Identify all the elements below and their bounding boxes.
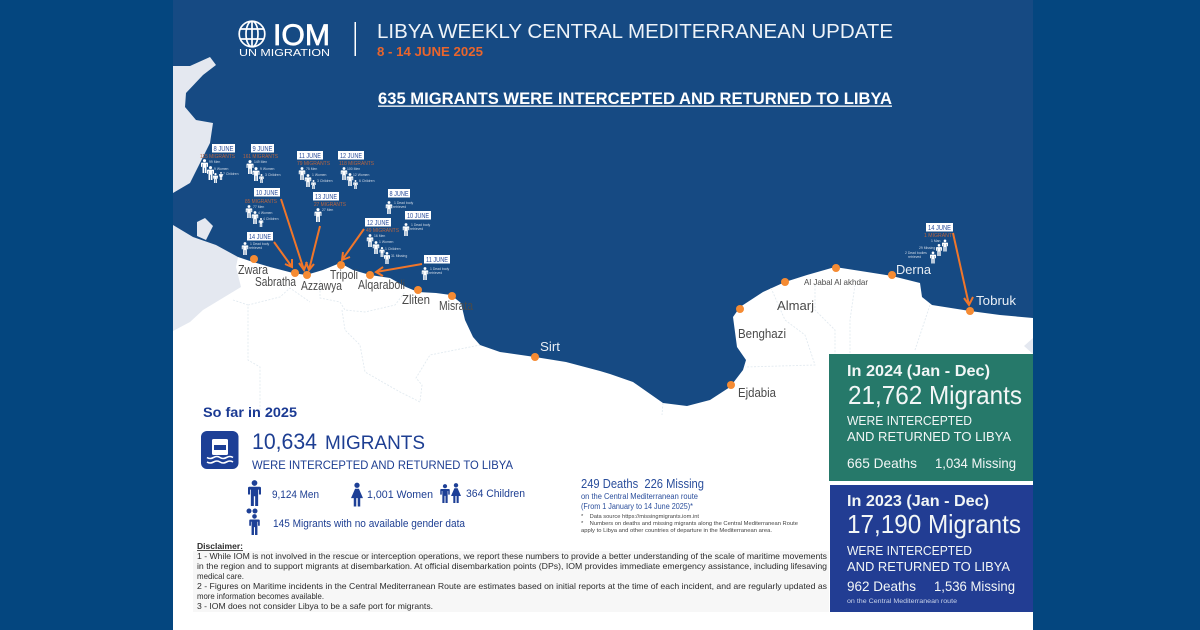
text block: deaths and missing 2025: * Data source https://missingmigrants.iom.int	[581, 514, 699, 520]
icon: boat on water	[201, 431, 238, 469]
incident: 8 June, 1 dead body: retrieved	[393, 205, 406, 209]
incident: 8 June, 1 dead body: 1 Dead body	[394, 201, 414, 205]
disclaimer	[193, 542, 829, 612]
panel: 2023 totals	[830, 485, 1033, 612]
gender breakdown: 145 Migrants with no available gender data	[273, 518, 466, 530]
incident: 14 June, Tobruk: retrieved	[908, 255, 921, 259]
header divider	[354, 22, 356, 56]
map labels: cities: Tripoli	[330, 268, 358, 282]
incident: 12 June, 49 migrants: 31 Missing	[391, 254, 407, 258]
incident: 11 June, 1 dead body	[422, 255, 450, 280]
total figure: 10,634	[252, 429, 317, 454]
incident: 11 June, 1 dead body: 11 JUNE	[426, 255, 448, 264]
incident: 10 June, 85 migrants: 10 JUNE	[256, 188, 278, 197]
panel: 2024 totals: 21,762 Migrants	[848, 380, 1022, 410]
incident: 14 June, Tobruk: 14 JUNE	[928, 223, 951, 232]
incident: 14 June, Tobruk: 1 MIGRANT	[924, 233, 953, 239]
incident: 9 June, 161 migrants: 9 JUNE	[252, 144, 273, 153]
map labels: cities: Tobruk	[976, 293, 1016, 308]
incident: 12 June, 49 migrants: 12 JUNE	[367, 218, 389, 227]
incident: 11 June, 79 migrants: 11 JUNE	[299, 151, 321, 160]
incident: 14 June, Tobruk: 29 Missing	[919, 246, 935, 250]
incident: 10 June, 85 migrants: 4 Children	[263, 217, 279, 221]
incident: 10 June, 1 dead body: 1 Dead body	[411, 223, 431, 227]
map labels: cities: Misrata	[439, 299, 473, 313]
total caption: WERE INTERCEPTED AND RETURNED TO LIBYA	[252, 458, 513, 472]
text block: deaths and missing 2025: * Numbers on deaths and missing migrants along the Central Mediterranean Route	[581, 521, 798, 527]
panel: 2024 totals: In 2024 (Jan - Dec)	[847, 363, 990, 380]
incident: 10 June, 1 dead body: retrieved	[410, 227, 423, 231]
map: land masses and borders	[173, 57, 1033, 630]
incident: 9 June, 161 migrants: 3 Children	[265, 173, 281, 177]
logo: IOM UN Migration: IOM	[273, 19, 330, 52]
incident: 10 June, 85 migrants: 85 MIGRANTS	[245, 199, 277, 205]
incident: 13 June, 27 migrants	[313, 192, 346, 222]
arrows: interception routes	[274, 199, 973, 305]
disclaimer: in the region and to support migrants at disembarkation. At official disembarkation points (DPs), IOM provides immediate emergency assistance, including lifesaving	[197, 562, 827, 571]
incident: 9 June, 161 migrants: 149 Men	[254, 160, 267, 164]
map labels: cities: Derna	[896, 262, 932, 277]
panel: 2024 totals	[829, 354, 1033, 481]
incident: 13 June, 27 migrants: 13 JUNE	[315, 192, 337, 201]
panel: 2023 totals: WERE INTERCEPTED	[847, 543, 972, 558]
gender breakdown	[246, 480, 525, 535]
incident: 13 June, 27 migrants: 27 MIGRANTS	[314, 202, 346, 208]
map labels: cities: Ejdabia	[738, 386, 776, 400]
panel: 2023 totals: AND RETURNED TO LIBYA	[847, 559, 1010, 574]
disclaimer: 2 - Figures on Maritime incidents in the Central Mediterranean Route are estimates based on initial reports at the time of each incident, and are regularly updated as	[197, 582, 827, 591]
incident: 12 June, 49 migrants	[365, 218, 407, 264]
incident: 8 June, 115 migrants	[200, 144, 239, 183]
disclaimer: more information becomes available.	[197, 592, 324, 601]
map labels: cities: Almarj	[777, 299, 814, 313]
heading: So far in 2025	[203, 404, 297, 420]
gender breakdown: 1,001 Women	[367, 489, 433, 501]
panel: 2024 totals: 665 Deaths	[847, 455, 917, 471]
title: LIBYA WEEKLY CENTRAL MEDITERRANEAN UPDATE	[377, 20, 893, 43]
icon: globe emblem	[239, 21, 265, 47]
incident: 13 June, 27 migrants: 27 Men	[322, 208, 333, 212]
disclaimer: Disclaimer:	[197, 542, 243, 551]
incident: 10 June, 1 dead body	[403, 211, 431, 236]
logo: IOM UN Migration: UN MIGRATION	[239, 48, 330, 59]
panel: 2023 totals: In 2023 (Jan - Dec)	[847, 493, 989, 510]
incident: 12 June, 49 migrants: 1 Women	[379, 240, 394, 244]
panel: 2024 totals: 1,034 Missing	[935, 455, 1016, 471]
panel: 2024 totals: AND RETURNED TO LIBYA	[847, 429, 1011, 444]
panel: 2023 totals: 962 Deaths	[847, 578, 916, 594]
panel: 2023 totals: 17,190 Migrants	[847, 509, 1021, 539]
incident: 11 June, 1 dead body: retrieved	[429, 271, 442, 275]
incident: 14 June, Tobruk: 2 Dead bodies	[905, 251, 927, 255]
incident: 11 June, 79 migrants: 75 Men	[306, 167, 317, 171]
incident: 14 June, 1 dead body: 1 Dead body	[250, 242, 270, 246]
incident: 14 June, 1 dead body: retrieved	[249, 246, 262, 250]
headline: 635 MIGRANTS WERE INTERCEPTED AND RETURNED TO LIBYA	[378, 89, 892, 108]
incident: 11 June, 79 migrants: 3 Children	[317, 179, 333, 183]
incident: 12 June, 49 migrants: 49 MIGRANTS	[366, 228, 399, 234]
panel: 2023 totals: on the Central Mediterranean route	[847, 599, 958, 605]
incident: 14 June, Tobruk: 1 Man	[931, 239, 941, 243]
incident: 10 June, 85 migrants	[245, 188, 280, 227]
incident: 12 June, 118 migrants: 118 MIGRANTS	[339, 161, 374, 167]
map panel: sea background	[173, 0, 1033, 630]
incident: 9 June, 161 migrants	[243, 144, 281, 183]
gender breakdown: 364 Children	[466, 488, 525, 500]
incident: 9 June, 161 migrants: 161 MIGRANTS	[243, 154, 278, 160]
incident: 14 June, 1 dead body: 14 JUNE	[249, 232, 271, 241]
incident: 11 June, 79 migrants	[297, 151, 333, 189]
incident: 10 June, 1 dead body: 10 JUNE	[407, 211, 429, 220]
incident: 14 June, 1 dead body	[242, 232, 273, 255]
map labels: cities: Benghazi	[738, 327, 786, 341]
map labels: cities: Zwara	[238, 263, 268, 277]
incident: 9 June, 161 migrants: 9 Women	[260, 167, 275, 171]
incident: 11 June, 1 dead body: 1 Dead body	[430, 267, 450, 271]
incident: 8 June, 115 migrants: 99 Men	[209, 160, 220, 164]
incident: 11 June, 79 migrants: 1 Women	[312, 173, 327, 177]
disclaimer: 1 - While IOM is not involved in the rescue or interception operations, we report these numbers to provide a better understanding of the scale of maritime movements	[197, 552, 827, 561]
incident: 10 June, 85 migrants: 4 Women	[258, 211, 273, 215]
incident: 8 June, 115 migrants: 8 JUNE	[214, 144, 234, 153]
incident: 8 June, 1 dead body	[386, 189, 414, 214]
map labels: cities: Sirt	[540, 339, 560, 354]
panel: so far in 2025	[201, 404, 525, 535]
logo: IOM UN Migration	[239, 19, 330, 59]
incident: 10 June, 85 migrants: 77 Men	[253, 205, 264, 209]
incident: 8 June, 115 migrants: 7 Children	[223, 172, 239, 176]
incident: 12 June, 49 migrants: 16 Men	[374, 234, 385, 238]
disclaimer: medical care.	[197, 572, 244, 581]
panel: 2024 totals: WERE INTERCEPTED	[847, 413, 972, 428]
incident: 12 June, 49 migrants: 1 Children	[385, 247, 401, 251]
text block: deaths and missing 2025: apply to Libya and other countries of departure in the Mediterranean area.	[581, 528, 773, 534]
incident: 8 June, 1 dead body: 8 JUNE	[390, 189, 409, 198]
map labels: cities: Alqaraboli	[358, 278, 405, 292]
map markers: cities	[250, 255, 974, 389]
map labels: cities: Sabratha	[255, 275, 296, 289]
panel: 2023 totals: 1,536 Missing	[934, 578, 1015, 594]
text block: deaths and missing 2025: (From 1 January to 14 June 2025)*	[581, 502, 693, 511]
incident: 14 June, Tobruk	[905, 223, 953, 264]
date range: 8 - 14 JUNE 2025	[377, 44, 483, 59]
incident: 12 June, 118 migrants: 12 JUNE	[340, 151, 362, 160]
incident: 12 June, 118 migrants: 6 Children	[359, 179, 375, 183]
disclaimer: 3 - IOM does not consider Libya to be a safe port for migrants.	[197, 602, 433, 611]
panel: so far in 2025: MIGRANTS	[325, 433, 425, 454]
text block: deaths and missing 2025	[581, 476, 798, 534]
gender breakdown: 9,124 Men	[272, 489, 319, 501]
map labels: cities: Al Jabal Al akhdar	[804, 277, 868, 287]
incident: 12 June, 118 migrants: 12 Women	[353, 173, 369, 177]
incident: 8 June, 115 migrants: 115 MIGRANTS	[200, 154, 235, 160]
map labels: cities	[238, 262, 1016, 400]
incident: 12 June, 118 migrants: 100 Men	[347, 167, 360, 171]
text block: deaths and missing 2025: on the Central Mediterranean route	[581, 492, 699, 501]
incident: 12 June, 118 migrants	[338, 151, 375, 189]
incident: 8 June, 115 migrants: 9 Women	[214, 167, 229, 171]
incident: 11 June, 79 migrants: 79 MIGRANTS	[297, 161, 330, 167]
text block: deaths and missing 2025: 249 Deaths 226 Missing	[581, 476, 704, 491]
map labels: cities: Zliten	[402, 293, 430, 307]
map labels: cities: Azzawya	[301, 279, 342, 293]
